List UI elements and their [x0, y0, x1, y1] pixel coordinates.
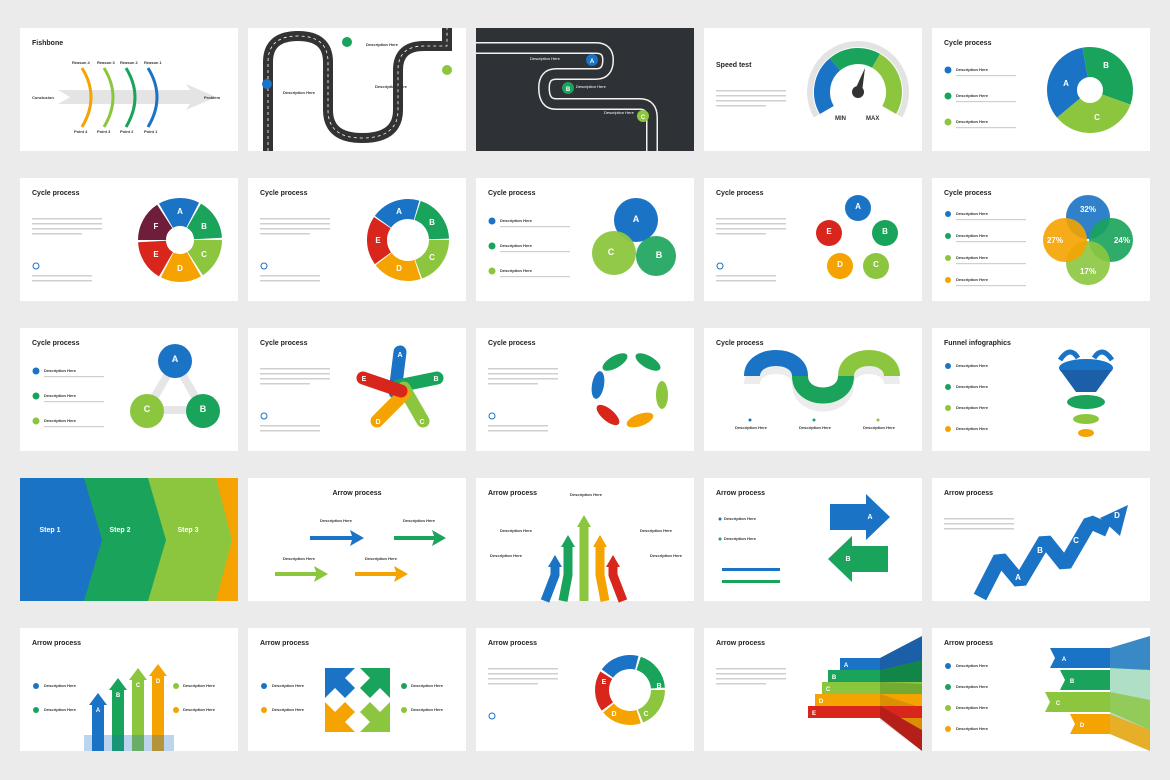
slide: arrow process up: Description Here [570, 492, 603, 497]
slide: zigzag: A [1015, 573, 1021, 582]
slide: cycle pie [944, 40, 1129, 129]
slide: horizontal bars 3d: E [812, 711, 816, 717]
slide: vertical arrows: Arrow process [32, 640, 81, 647]
slide: cross arrows: Description Here [411, 707, 444, 712]
slide: funnel: Description Here [956, 384, 989, 389]
slide: fishbone: Fishbone [32, 40, 63, 47]
slide: two arrows: Description Here [724, 516, 757, 521]
slide: speed test: MAX [866, 116, 879, 122]
slide: venn: Description Here [500, 243, 533, 248]
slide: circle arrows: B [656, 683, 662, 690]
slide: cycle 6 segments: A [177, 207, 183, 216]
slide: road: Description Here [375, 84, 408, 89]
slide: arrow process 1: Arrow process [332, 490, 382, 497]
slide: venn: Description Here [500, 218, 533, 223]
slide: vertical arrows: D [156, 679, 161, 685]
slide: arrow process up: Description Here [490, 553, 523, 558]
slide: four circles percent: Description Here [956, 233, 989, 238]
slide: triangle circles [32, 340, 220, 428]
slide: wave: Description Here [735, 425, 768, 430]
slide: vertical arrows: A [96, 708, 101, 714]
slide: leaves: Cycle process [488, 340, 536, 347]
slide: cycle pie: B [1103, 61, 1109, 70]
slide: cycle ring 5 [260, 190, 451, 283]
slide: vertical arrows: B [116, 693, 121, 699]
slide: cycle 6 segments: Cycle process [32, 190, 80, 197]
slide: bars 3d right: Description Here [956, 726, 989, 731]
slide: bars 3d right [944, 636, 1150, 751]
slide: cross arrows: Description Here [272, 683, 305, 688]
slide: fishbone: Reason 4 [72, 60, 91, 65]
slide: cross arrows: Arrow process [260, 640, 309, 647]
slide: five circles: A [855, 202, 861, 211]
slide: vertical arrows: C [136, 683, 141, 689]
slide: arrow process up [488, 490, 683, 601]
slide: bars 3d right: Arrow process [944, 640, 993, 647]
slide: speed test: Speed test [716, 62, 752, 69]
slide: steps: Step 1 [39, 527, 61, 534]
slide: bars 3d right: Description Here [956, 705, 989, 710]
slide: triangle circles: Cycle process [32, 340, 80, 347]
slide: steps [20, 478, 238, 601]
slide: cross arrows [260, 640, 444, 732]
slide: arrow process 1: Description Here [365, 556, 398, 561]
slide: cycle ring 5: E [375, 236, 381, 245]
slide: triangle circles: Description Here [44, 418, 77, 423]
slide: road: Description Here [283, 90, 316, 95]
slide: fishbone: Conclusion [32, 95, 54, 100]
slide: arrow process 1: Description Here [403, 518, 436, 523]
slide: fishbone: Reason 3 [97, 60, 116, 65]
slide: cycle ring 5: A [396, 207, 402, 216]
slide: knot star [260, 340, 439, 432]
slide: wave [716, 340, 896, 430]
slide: cycle 6 segments: D [177, 264, 183, 273]
slide: zigzag: B [1037, 546, 1043, 555]
slide: arrow process up: Description Here [650, 553, 683, 558]
slide: horizontal bars 3d: C [826, 687, 831, 693]
slide: zigzag: D [1114, 511, 1120, 520]
slide: knot star: D [375, 419, 381, 426]
slide: triangle circles: C [144, 404, 151, 414]
slide: knot star: B [433, 376, 439, 383]
slide: speed test: MIN [835, 116, 846, 122]
slide: fishbone: Point 1 [144, 129, 158, 134]
slide: four circles percent: Description Here [956, 255, 989, 260]
slide: venn: Description Here [500, 268, 533, 273]
slide: fishbone: Problem [204, 95, 220, 100]
slide: bars 3d right: C [1056, 701, 1061, 707]
slide: horizontal bars 3d: Arrow process [716, 640, 765, 647]
slide: circle arrows: E [602, 679, 607, 686]
slide: wave: Description Here [863, 425, 896, 430]
slide: triangle circles: Description Here [44, 393, 77, 398]
slide: five circles: E [826, 227, 832, 236]
slide: funnel: Description Here [956, 363, 989, 368]
slide: funnel: Funnel infographics [944, 340, 1011, 347]
slide: five circles: D [837, 260, 843, 269]
slide: five circles: C [873, 260, 879, 269]
slide: cycle ring 5: C [429, 253, 435, 262]
slide: speed test [716, 44, 906, 122]
slide: dark road: A [590, 59, 595, 65]
slide: five circles: Cycle process [716, 190, 764, 197]
slide: vertical arrows: Description Here [44, 683, 77, 688]
slide: two arrows: Arrow process [716, 490, 765, 497]
slide: arrow process up: Description Here [640, 528, 673, 533]
slide: cycle pie: Description Here [956, 119, 989, 124]
slide: horizontal bars 3d [716, 636, 922, 751]
slide: four circles percent: 17% [1080, 267, 1096, 276]
slide: cross arrows: Description Here [411, 683, 444, 688]
slide: five circles: B [882, 227, 888, 236]
slide: two arrows: B [845, 556, 851, 563]
slide: arrow process up: Description Here [500, 528, 533, 533]
slide: five circles [716, 190, 898, 282]
slide: steps: Step 2 [109, 527, 131, 534]
slide: cycle ring 5: Cycle process [260, 190, 308, 197]
slide: arrow process 1: Description Here [320, 518, 353, 523]
slide: cycle 6 segments: F [154, 222, 159, 231]
slide: cycle 6 segments [32, 190, 218, 282]
slide: fishbone [32, 40, 220, 134]
slide: wave: Description Here [799, 425, 832, 430]
slide: fishbone: Reason 1 [144, 60, 163, 65]
slide: triangle circles: Description Here [44, 368, 77, 373]
slide: knot star: C [419, 419, 425, 426]
slide: circle arrows: Arrow process [488, 640, 537, 647]
slide: knot star: Cycle process [260, 340, 308, 347]
slide: venn: C [608, 247, 615, 257]
slide: road [262, 28, 452, 151]
slide: horizontal bars 3d: A [844, 663, 849, 669]
slide: cycle pie: Description Here [956, 93, 989, 98]
slide: horizontal bars 3d: D [819, 699, 824, 705]
slide: circle arrows: D [611, 711, 617, 718]
slide: funnel [944, 340, 1113, 437]
slide: cycle pie: A [1063, 79, 1069, 88]
slide: dark road: B [566, 87, 571, 93]
slide: vertical arrows: Description Here [183, 707, 216, 712]
slide: dark road [476, 28, 694, 151]
slide: cycle 6 segments: B [201, 222, 207, 231]
slide: bars 3d right: Description Here [956, 663, 989, 668]
slide: triangle circles: A [172, 354, 179, 364]
slide: bars 3d right: B [1070, 679, 1075, 685]
slide: cycle ring 5: B [429, 218, 435, 227]
slide: zigzag [944, 490, 1128, 597]
slide: cycle 6 segments: C [201, 250, 207, 259]
slide: fishbone: Point 4 [74, 129, 88, 134]
slide: cycle 6 segments: E [153, 250, 159, 259]
slide: cross arrows: Description Here [272, 707, 305, 712]
slide: wave: Cycle process [716, 340, 764, 347]
slide: four circles percent: Cycle process [944, 190, 992, 197]
slide: vertical arrows [32, 640, 216, 751]
slide: venn: A [633, 214, 640, 224]
slide: arrow process 1: Description Here [283, 556, 316, 561]
slide: venn [488, 190, 676, 277]
slide: vertical arrows: Description Here [183, 683, 216, 688]
slide: four circles percent: 24% [1114, 236, 1130, 245]
slide: two arrows: A [867, 514, 873, 521]
slide: vertical arrows: Description Here [44, 707, 77, 712]
slide: arrow process 1 [275, 490, 446, 582]
slide: dark road: C [641, 115, 646, 121]
slide: dark road: Description Here [576, 84, 607, 89]
slide: road: Description Here [366, 42, 399, 47]
slide: circle arrows [488, 640, 669, 729]
slide: cycle pie: C [1094, 113, 1100, 122]
slide: cycle pie: Cycle process [944, 40, 992, 47]
slide: steps: Step 3 [177, 527, 199, 534]
slide: fishbone: Point 2 [120, 129, 134, 134]
slide: two arrows: Description Here [724, 536, 757, 541]
slide: triangle circles: B [200, 404, 207, 414]
slide: zigzag: Arrow process [944, 490, 993, 497]
slide: dark road: Description Here [604, 110, 635, 115]
slide: dark road: Description Here [530, 56, 561, 61]
slide: two arrows [716, 490, 890, 583]
slide: fishbone: Reason 2 [120, 60, 139, 65]
slide: venn: B [656, 250, 663, 260]
slide: circle arrows: C [643, 711, 649, 718]
slide: arrow process up: Arrow process [488, 490, 537, 497]
slide: leaves [488, 340, 668, 432]
slide: four circles percent [944, 190, 1133, 286]
slide: bars 3d right: A [1062, 657, 1067, 663]
slide: bars 3d right: Description Here [956, 684, 989, 689]
slide: horizontal bars 3d: B [832, 675, 837, 681]
slide: four circles percent: Description Here [956, 211, 989, 216]
slide: four circles percent: 32% [1080, 205, 1096, 214]
slide: four circles percent: 27% [1047, 236, 1063, 245]
slide: fishbone: Point 3 [97, 129, 111, 134]
slide: zigzag: C [1073, 536, 1079, 545]
slide: arrow process up: A [542, 560, 547, 566]
slide: bars 3d right: D [1080, 723, 1085, 729]
slide: cycle ring 5: D [396, 264, 402, 273]
slide: cycle pie: Description Here [956, 67, 989, 72]
slide: four circles percent: Description Here [956, 277, 989, 282]
slide: knot star: E [362, 376, 367, 383]
slide: funnel: Description Here [956, 405, 989, 410]
slide: funnel: Description Here [956, 426, 989, 431]
slide: knot star: A [397, 352, 403, 359]
slide: venn: Cycle process [488, 190, 536, 197]
